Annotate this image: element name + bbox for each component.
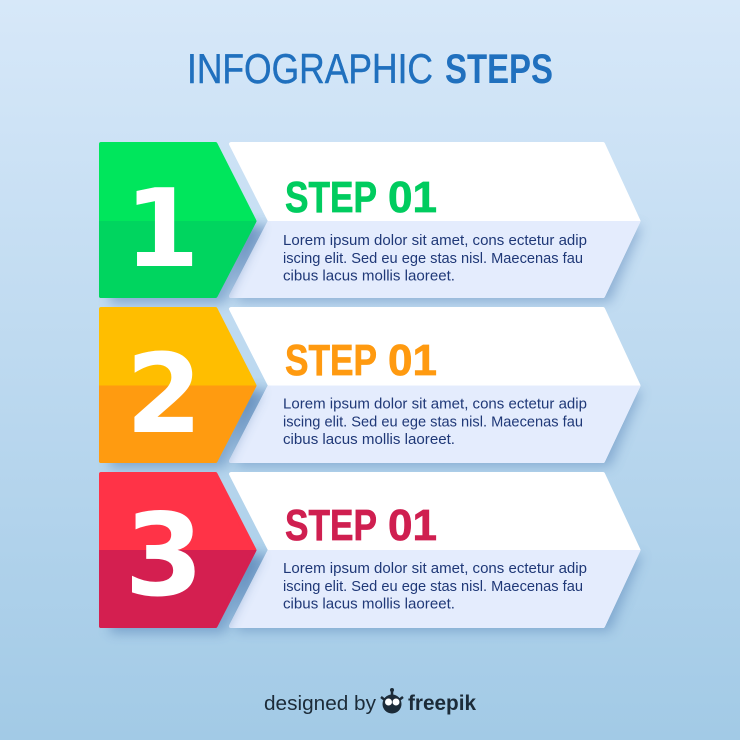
text: step 2 body: Lorem ipsum dolor sit amet, cons ectetur adip xyxy=(283,396,587,412)
heading: step 1: STEP xyxy=(285,173,377,222)
panel: step 1 xyxy=(101,144,642,304)
text: step 2 body xyxy=(283,396,587,448)
heading: step 3: 01 xyxy=(388,501,437,550)
number 3: 3 xyxy=(124,489,204,622)
number 1: 1 xyxy=(124,167,200,292)
heading: step 3: STEP xyxy=(285,501,377,550)
footer credit: designed by xyxy=(264,693,376,715)
footer credit: freepik xyxy=(408,692,476,715)
badge: step 3 xyxy=(101,474,262,633)
panel: step 3 xyxy=(101,474,642,633)
text: step 2 body: iscing elit. Sed eu ege stas nisl. Maecenas fau xyxy=(283,414,583,430)
title: INFOGRAPHIC xyxy=(187,45,433,92)
text: step 3 body: cibus lacus mollis laoreet. xyxy=(283,596,455,612)
icon: freepik mascot xyxy=(381,688,403,714)
text: step 3 body: iscing elit. Sed eu ege stas nisl. Maecenas fau xyxy=(283,578,583,595)
badge: step 1 xyxy=(101,144,262,304)
footer credit xyxy=(264,688,476,715)
badge: step 2 xyxy=(101,309,262,468)
heading: step 1: 01 xyxy=(388,173,437,222)
banner: step 3 xyxy=(231,474,642,631)
heading: step 2: STEP xyxy=(285,336,377,385)
text: step 3 body: Lorem ipsum dolor sit amet, cons ectetur adip xyxy=(283,560,587,577)
text: step 1 body: cibus lacus mollis laoreet. xyxy=(283,268,455,284)
heading: step 2: 01 xyxy=(388,336,437,385)
text: step 3 body xyxy=(283,560,587,612)
banner: step 2 xyxy=(231,309,642,466)
text: step 1 body: iscing elit. Sed eu ege stas nisl. Maecenas fau xyxy=(283,250,583,267)
text: step 1 body xyxy=(283,232,587,284)
title: STEPS xyxy=(445,45,553,92)
number 2: 2 xyxy=(126,330,202,458)
text: step 1 body: Lorem ipsum dolor sit amet, cons ectetur adip xyxy=(283,232,587,249)
text: step 2 body: cibus lacus mollis laoreet. xyxy=(283,431,455,448)
banner: step 1 xyxy=(231,144,642,302)
panel: step 2 xyxy=(101,309,642,468)
